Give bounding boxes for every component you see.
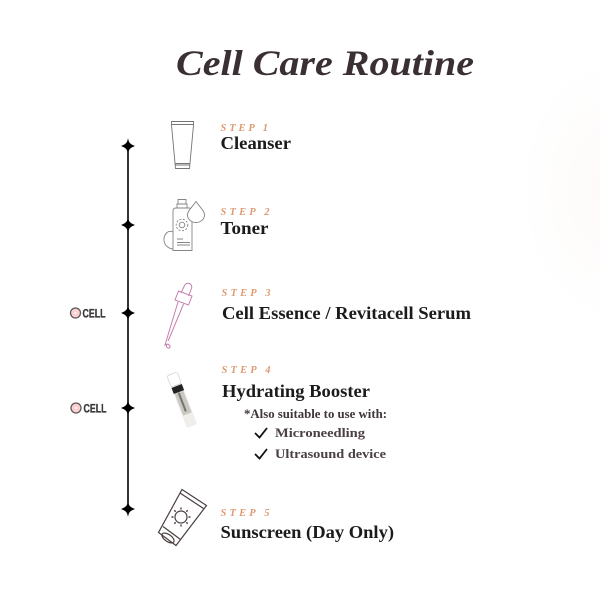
step 1 text [220, 123, 291, 153]
step 5 text: STEP 5 [220, 508, 270, 519]
note: also suitable: *Also suitable to use with: [244, 406, 387, 421]
check: microneedling: Microneedling [275, 425, 366, 440]
step 5 text [220, 508, 394, 542]
badge: cell step 4: CELL [84, 404, 106, 416]
step 4 text [222, 365, 387, 421]
icon: toner bottle [164, 200, 204, 250]
step 3 text: STEP 3 [222, 288, 270, 299]
step 2 text: Toner [220, 218, 269, 238]
badge: cell step 3 [70, 308, 106, 320]
step 5 text: Sunscreen (Day Only) [220, 522, 394, 542]
step 4 text: Hydrating Booster [222, 381, 370, 401]
timeline [121, 138, 135, 517]
step 1 text: STEP 1 [220, 123, 268, 134]
icon: dropper [165, 283, 192, 348]
title: Cell Care Routine [176, 43, 474, 83]
badge: cell step 3: CELL [82, 308, 106, 320]
icon: vial [167, 372, 197, 428]
step 4 text: STEP 4 [222, 365, 270, 376]
check: ultrasound device: Ultrasound device [275, 446, 386, 461]
badge: cell step 4 [71, 403, 106, 416]
step 2 text: STEP 2 [220, 207, 270, 218]
icon: sunscreen tube [158, 490, 206, 546]
step 3 text: Cell Essence / Revitacell Serum [222, 303, 471, 323]
step 1 text: Cleanser [220, 133, 291, 153]
step 3 text [222, 288, 471, 323]
step 2 text [220, 207, 270, 238]
icon: cleanser tube [172, 122, 194, 168]
